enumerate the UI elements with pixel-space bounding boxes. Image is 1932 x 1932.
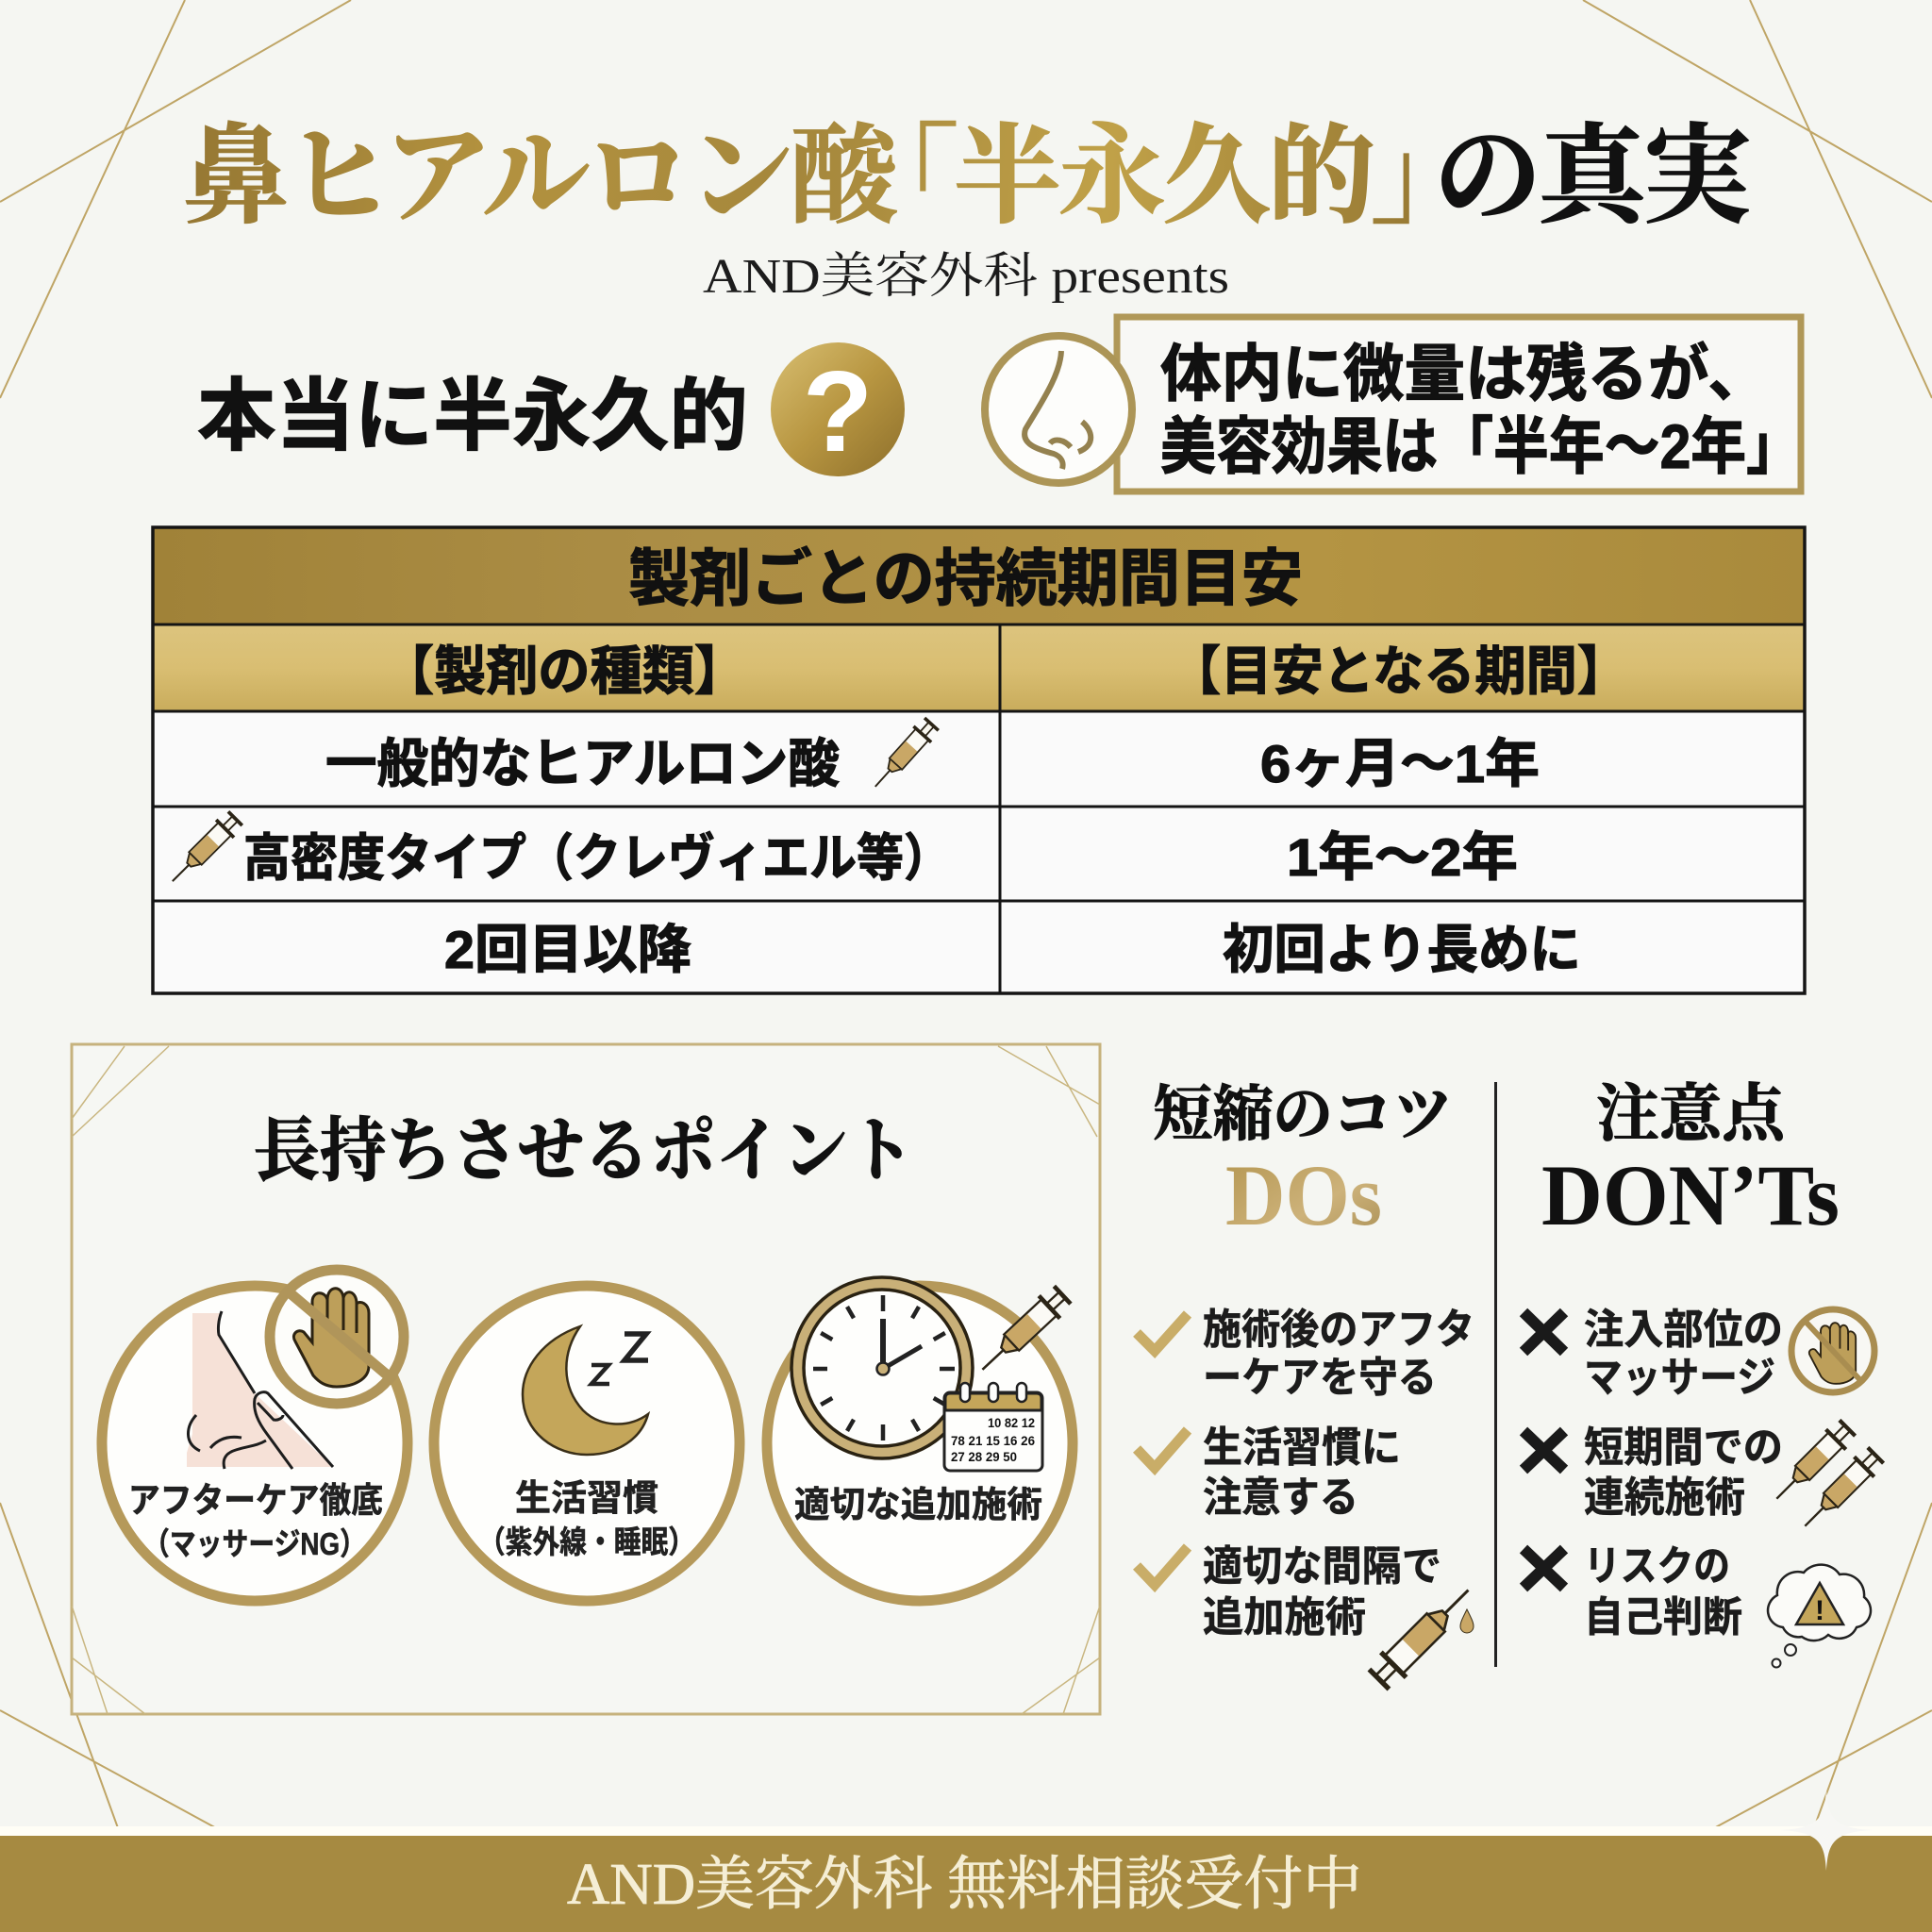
row 3 value: 初回より長めに bbox=[1223, 920, 1581, 979]
item 2: 生活習慣に bbox=[1203, 1424, 1401, 1471]
row 2 value: 1年～2年 bbox=[1287, 827, 1518, 887]
DOs label: DOs bbox=[1225, 1147, 1382, 1243]
item 1 bbox=[1137, 1307, 1474, 1401]
item 2 bbox=[1137, 1424, 1401, 1521]
callout: answer bbox=[1117, 317, 1802, 491]
row 1 label: 一般的なヒアルロン酸 bbox=[325, 734, 840, 793]
subtitle: AND美容外科 presents bbox=[703, 250, 1229, 304]
column: DOs bbox=[1137, 1081, 1481, 1691]
icon: two syringes bbox=[1767, 1418, 1886, 1536]
DON'Ts label: DON’Ts bbox=[1541, 1147, 1840, 1243]
item 3 bbox=[1137, 1543, 1441, 1641]
footer banner bbox=[0, 1836, 1932, 1932]
callout: answer: 美容効果は「半年～2年」 bbox=[1160, 411, 1802, 481]
panel heading: 長持ちさせるポイント bbox=[254, 1113, 914, 1191]
tip label: 生活習慣 bbox=[515, 1479, 658, 1519]
icon: calendar: 27 28 29 50 bbox=[951, 1449, 1017, 1464]
icon: question mark: ? bbox=[803, 347, 873, 475]
tip label: アフターケア徹底 bbox=[128, 1481, 383, 1520]
icon: syringe bbox=[972, 1284, 1073, 1381]
column header: type: 【製剤の種類】 bbox=[382, 641, 746, 701]
heading: 短縮のコツ bbox=[1153, 1081, 1453, 1148]
callout: answer: 体内に微量は残るが、 bbox=[1160, 339, 1769, 408]
icon: warning thought cloud bbox=[1768, 1565, 1871, 1668]
heading: 注意点 bbox=[1596, 1080, 1789, 1149]
icon: calendar bbox=[944, 1383, 1042, 1471]
icon: syringe with drop bbox=[1367, 1577, 1481, 1691]
item 2: 連続施術 bbox=[1584, 1474, 1745, 1521]
tip: aftercare bbox=[102, 1270, 408, 1601]
footer banner: AND美容外科 無料相談受付中 bbox=[567, 1853, 1362, 1917]
item 1: マッサージ bbox=[1584, 1355, 1775, 1401]
icon: nose bbox=[985, 336, 1132, 483]
item 3: 追加施術 bbox=[1203, 1594, 1366, 1641]
icon: no touching bbox=[270, 1270, 404, 1404]
title: の真実 bbox=[1434, 117, 1751, 237]
icon: clock bbox=[791, 1277, 973, 1458]
tip label: 適切な追加施術 bbox=[794, 1486, 1042, 1525]
item 3: 自己判断 bbox=[1584, 1594, 1742, 1641]
row 2 label: 高密度タイプ（クレヴィエル等） bbox=[243, 830, 951, 887]
item 2: 短期間での bbox=[1584, 1424, 1783, 1471]
icon: question mark bbox=[771, 342, 905, 476]
item 2: 注意する bbox=[1203, 1474, 1358, 1521]
item 1: 施術後のアフタ bbox=[1203, 1307, 1474, 1353]
tip sublabel: （マッサージNG） bbox=[143, 1526, 366, 1561]
icon: calendar: 78 21 15 16 26 bbox=[951, 1433, 1035, 1448]
icon: warning thought cloud: ! bbox=[1815, 1595, 1824, 1626]
icon: sparkle bbox=[1780, 1790, 1873, 1871]
icon: calendar: 10 82 12 bbox=[988, 1415, 1035, 1430]
icon: sleep z bbox=[591, 1334, 648, 1384]
tip: additional treatment bbox=[767, 1277, 1073, 1601]
column: DON'Ts bbox=[1524, 1080, 1886, 1668]
row 3 label: 2回目以降 bbox=[444, 920, 691, 979]
item 3: 適切な間隔で bbox=[1203, 1543, 1441, 1590]
item 3: リスクの bbox=[1584, 1543, 1730, 1590]
table title: 製剤ごとの持続期間目安 bbox=[628, 543, 1303, 613]
table: duration by product bbox=[153, 527, 1805, 993]
tip sublabel: （紫外線・睡眠） bbox=[478, 1524, 695, 1559]
icon: syringe bbox=[866, 716, 941, 794]
item 1 bbox=[1524, 1307, 1783, 1401]
title: 鼻ヒアルロン酸「半永久的」 bbox=[182, 117, 1478, 237]
heading: question: 本当に半永久的 bbox=[197, 372, 748, 460]
item 3 bbox=[1524, 1543, 1742, 1641]
item 1: 注入部位の bbox=[1584, 1307, 1783, 1353]
icon: moon bbox=[523, 1326, 648, 1455]
illustration: nose and finger bbox=[187, 1311, 333, 1469]
icon: syringe bbox=[163, 809, 244, 891]
icon: no touching bbox=[1791, 1309, 1874, 1392]
column header: period: 【目安となる期間】 bbox=[1170, 641, 1628, 701]
panel: tips to make it last bbox=[72, 1044, 1100, 1714]
tip: lifestyle bbox=[434, 1286, 740, 1601]
item 1: ーケアを守る bbox=[1203, 1355, 1437, 1401]
item 2 bbox=[1524, 1424, 1783, 1521]
row 1 value: 6ヶ月～1年 bbox=[1260, 734, 1540, 793]
